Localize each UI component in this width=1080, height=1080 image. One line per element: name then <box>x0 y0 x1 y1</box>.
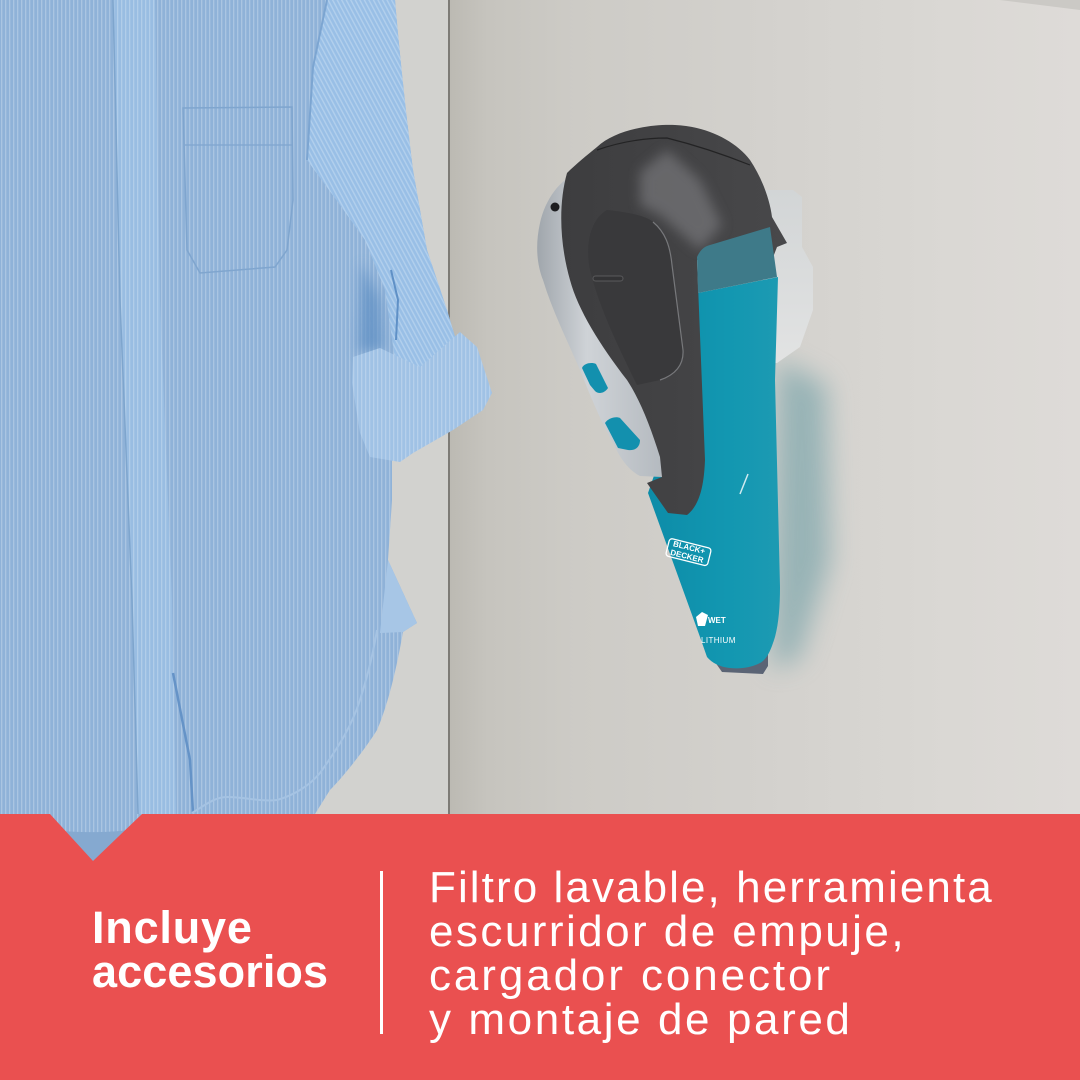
vacuum labels: DECKER <box>669 548 705 565</box>
vacuum recess highlight <box>653 222 683 380</box>
vacuum labels <box>665 474 748 645</box>
description text: y montaje de pared <box>429 995 852 1044</box>
vacuum upper sheen <box>640 150 722 250</box>
description text: Filtro lavable, herramienta <box>429 863 994 912</box>
shirt placket <box>113 0 176 814</box>
seam and crease lines <box>307 0 327 160</box>
rolled cuff <box>352 332 492 462</box>
vacuum labels: LITHIUM <box>701 636 736 645</box>
vacuum trim hole <box>550 202 560 212</box>
description text: cargador conector <box>429 951 833 1000</box>
sleeve crease shadow <box>358 262 384 352</box>
vacuum water tank <box>648 277 780 668</box>
vacuum silver trim <box>537 172 680 477</box>
vacuum handle slit <box>593 276 623 281</box>
shirt pocket <box>183 107 293 273</box>
shirt <box>0 0 492 900</box>
sleeve <box>307 0 457 367</box>
vacuum labels: BLACK+ <box>672 539 706 556</box>
banner <box>0 814 1080 1080</box>
vacuum handle recess <box>588 210 683 385</box>
description text: escurridor de empuje, <box>429 907 906 956</box>
vacuum cap line <box>597 138 750 165</box>
vacuum tank translucent top <box>697 227 777 293</box>
vacuum buttons <box>582 363 640 450</box>
wall background <box>300 0 1080 814</box>
heading: accesorios <box>92 946 328 997</box>
side vent flap <box>380 560 417 633</box>
wall mount <box>760 190 813 363</box>
divider <box>380 871 383 1034</box>
vacuum shadow on wall <box>772 360 830 668</box>
lower hem in notch <box>50 828 142 870</box>
vacuum <box>537 125 787 674</box>
vacuum nozzle tip <box>715 652 768 674</box>
vacuum labels: WET <box>708 616 726 625</box>
heading <box>92 902 328 997</box>
vacuum body <box>561 125 787 515</box>
heading: Incluye <box>92 902 253 953</box>
description text <box>429 863 994 1044</box>
